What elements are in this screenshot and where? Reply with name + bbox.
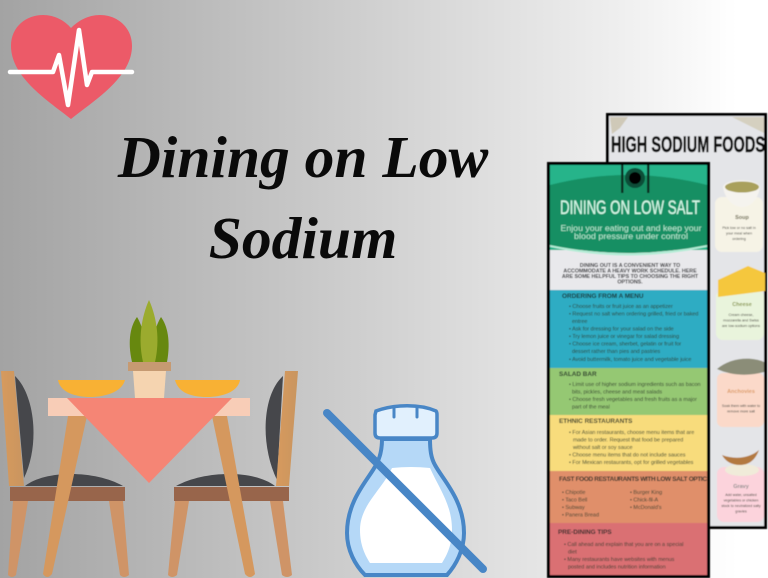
section: pre-dining tips: • Many restaurants have websites with menus	[564, 557, 675, 563]
section: salad bar: • Limit use of higher sodium ingredients such as bacon	[569, 382, 701, 388]
food card: anchovies: remove more salt	[727, 410, 755, 414]
section: salad bar	[550, 368, 707, 415]
section: ordering from a menu: • Avoid buttermilk, tomato juice and vegetable juice	[569, 357, 691, 363]
section: fast food restaurants: • Chipotle	[562, 490, 585, 496]
illustration: crossed-out salt shaker	[327, 406, 483, 575]
food card: soup: Pick low or no salt in	[722, 226, 756, 230]
food card: gravy: Add water, unsalted	[725, 493, 757, 497]
title: Dining on Low	[117, 124, 488, 190]
section: ordering from a menu	[550, 290, 707, 368]
food card: soup: Soup	[735, 215, 750, 221]
section: pre-dining tips: posted and includes nutrition information	[568, 564, 666, 570]
intro text: DINING OUT IS A CONVENIENT WAY TO	[580, 263, 680, 269]
food card: cheese: Cream cheese,	[728, 313, 754, 317]
section: salad bar: • Choose fresh vegetables and fresh fruits as a major	[569, 397, 697, 403]
section: fast food restaurants: • McDonald's	[630, 505, 662, 511]
food card: soup: ordering	[732, 237, 746, 241]
section: fast food restaurants: • Subway	[562, 505, 585, 511]
right chair	[168, 371, 298, 577]
section: ethnic restaurants: ETHNIC RESTAURANTS	[559, 418, 633, 425]
section: fast food restaurants: • Taco Bell	[562, 498, 587, 504]
section: ordering from a menu: • Request no salt when ordering grilled, fried or baked	[569, 312, 698, 318]
section: ordering from a menu: ORDERING FROM A MENU	[562, 293, 644, 300]
illustration: dining table with chairs	[1, 300, 298, 577]
intro text: ACCOMMODATE A HEAVY WORK SCHEDULE. HERE	[563, 268, 697, 274]
left chair	[1, 371, 129, 577]
food card: gravy: Gravy	[733, 484, 750, 490]
food card: gravy	[717, 450, 764, 522]
section: pre-dining tips: diet	[568, 550, 577, 556]
section: salad bar: bits, pickles, cheese and meat salads	[572, 390, 662, 396]
food card: gravy: gravies	[735, 510, 747, 514]
section: ethnic restaurants: made to order. Request that food be prepared	[573, 438, 683, 444]
poster header	[550, 165, 707, 256]
section: fast food restaurants: • Chick-fil-A	[630, 498, 659, 504]
icon: plate and cutlery	[621, 165, 650, 193]
food card: anchovies: Anchovies	[727, 389, 755, 395]
section: ordering from a menu: • Try lemon juice or vinegar for salad dressing	[569, 334, 679, 340]
section: ordering from a menu: dessert rather than pies and pastries	[572, 349, 661, 355]
potted plant	[128, 300, 171, 398]
poster header: Enjou your eating out and keep your	[560, 224, 702, 233]
food card: soup	[715, 180, 763, 252]
section: fast food restaurants: • Panera Bread	[562, 512, 599, 518]
tablecloth	[67, 398, 232, 483]
section: fast food restaurants	[550, 471, 707, 523]
title: Sodium	[209, 205, 397, 271]
section: ordering from a menu: entree	[572, 319, 587, 325]
table top	[48, 398, 250, 416]
intro text: ARE SOME HELPFUL TIPS TO CHOOSING THE RIGHT	[562, 274, 699, 280]
title	[117, 124, 488, 271]
section: ordering from a menu: • Ask for dressing for your salad on the side	[569, 326, 674, 332]
poster: high sodium foods	[606, 113, 767, 529]
section: ordering from a menu: • Choose ice cream, sherbet, gelatin or fruit for	[569, 342, 681, 348]
food card: anchovies: Soak them with water to	[722, 404, 760, 408]
food card: soup: your meal when	[726, 232, 752, 236]
food card: anchovies	[717, 359, 764, 427]
section: ethnic restaurants: • Choose menu items that do not include sauces	[569, 452, 686, 458]
intro text	[562, 263, 699, 286]
section: fast food restaurants: • Burger King	[630, 490, 662, 496]
food card: cheese: mozzarella and Swiss	[723, 318, 759, 322]
section: salad bar: SALAD BAR	[559, 371, 597, 378]
food card: cheese: Cheese	[732, 302, 752, 308]
poster header: blood pressure under control	[574, 232, 688, 241]
poster: dining on low salt	[547, 162, 710, 578]
poster header: DINING ON LOW SALT	[560, 198, 700, 219]
section: pre-dining tips	[550, 523, 707, 575]
section: fast food restaurants: FAST FOOD RESTAURANTS WITH LOW SALT OPTIC	[559, 476, 707, 483]
section: ethnic restaurants: • For Asian restaurants, choose menu items that are	[569, 430, 694, 436]
section: pre-dining tips: PRE-DINING TIPS	[558, 529, 612, 536]
food card: cheese: are low-sodium options	[722, 324, 760, 328]
section: ethnic restaurants	[550, 415, 707, 471]
section: pre-dining tips: • Call ahead and explain that you are on a special	[564, 542, 684, 548]
food card: gravy: vegetables or chicken	[724, 498, 758, 502]
section: ordering from a menu: • Choose fruits or fruit juice as an appetizer	[569, 304, 673, 310]
icon: heart with pulse line	[10, 15, 132, 119]
food card: gravy: stock to neutralized salty	[721, 504, 761, 508]
section: ethnic restaurants: without salt or soy sauce	[572, 445, 633, 451]
intro text: OPTIONS.	[617, 280, 643, 286]
food card: cheese	[716, 266, 765, 340]
section: ethnic restaurants: • For Mexican restaurants, opt for grilled vegetables	[569, 460, 694, 466]
bowls	[58, 380, 125, 397]
section: salad bar: part of the meal	[572, 404, 610, 410]
floral corners	[610, 117, 628, 134]
table legs	[43, 416, 87, 577]
